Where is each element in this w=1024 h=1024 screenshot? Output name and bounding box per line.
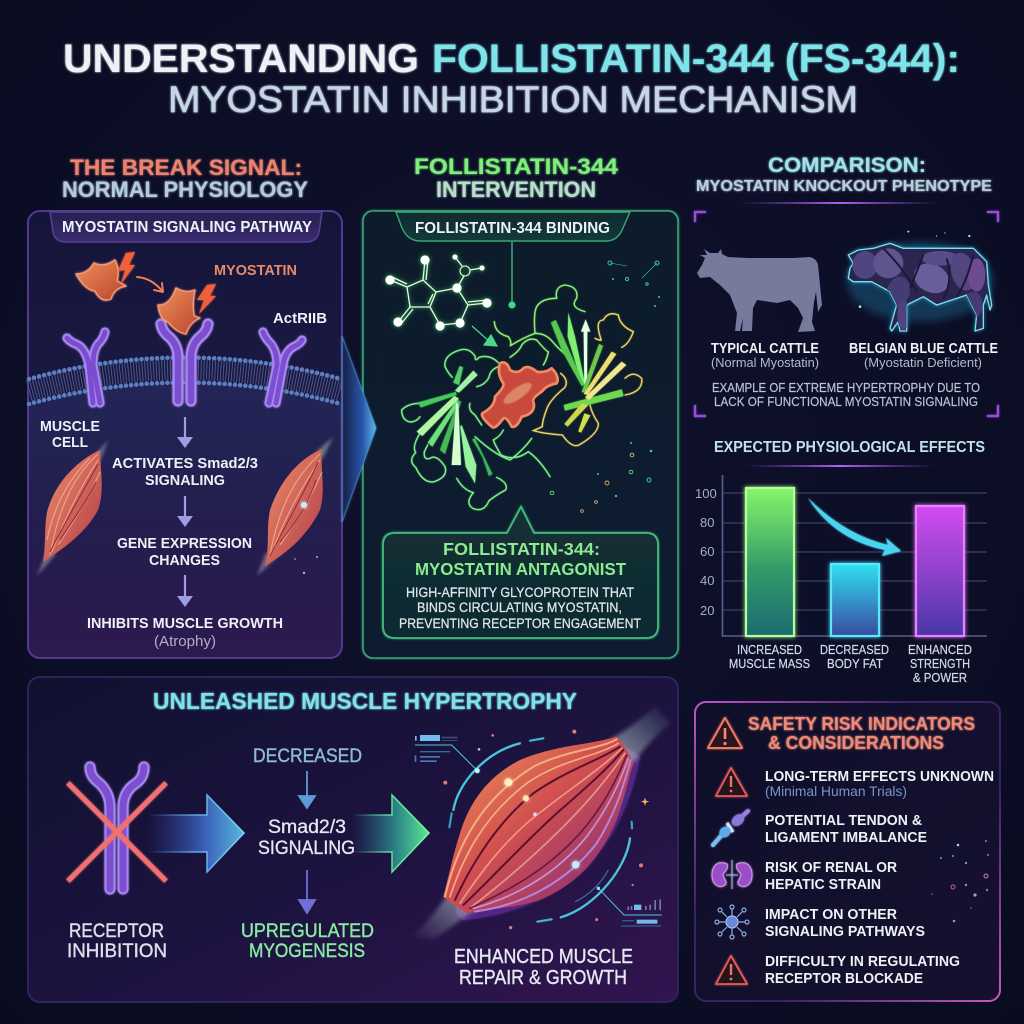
risk: tendon imbalance: LIGAMENT IMBALANCE: [765, 830, 927, 846]
bar labels: MUSCLE MASS: [729, 657, 810, 671]
label: ActRIIB: ActRIIB: [273, 310, 327, 327]
heading: & CONSIDERATIONS: [768, 733, 944, 753]
pointer line: [508, 242, 516, 309]
panel: safety risks: [695, 702, 1000, 1001]
step: activates smad: ACTIVATES Smad2/3: [112, 455, 258, 472]
axes: [722, 475, 987, 636]
label: typical cattle: [711, 341, 819, 370]
particles: [550, 261, 660, 512]
panel: follistatin binding: [363, 211, 678, 658]
title: FOLLISTATIN-344 (FS-344):: [432, 37, 960, 81]
tab heading: [50, 212, 322, 242]
risk: receptor blockade: DIFFICULTY IN REGULATING: [765, 954, 960, 970]
grid lines: [723, 493, 987, 610]
receptor left: [67, 332, 105, 403]
sparks: [443, 730, 649, 929]
heading: the break signal: [62, 155, 308, 202]
flow arrows: [177, 417, 193, 607]
callout: antagonist: [383, 507, 658, 638]
panel: cattle comparison: [695, 202, 998, 416]
callout: antagonist: HIGH-AFFINITY GLYCOPROTEIN THAT: [406, 585, 634, 600]
heading: SAFETY RISK INDICATORS: [748, 714, 975, 734]
arrow: to muscle: [352, 795, 429, 872]
description: LACK OF FUNCTIONAL MYOSTATIN SIGNALING: [714, 394, 978, 409]
tab heading: [396, 212, 630, 241]
bar: body fat: [831, 564, 879, 636]
label: enhanced muscle: ENHANCED MUSCLE: [454, 946, 633, 968]
heading: the break signal: THE BREAK SIGNAL:: [70, 155, 302, 180]
cow: belgian blue: [847, 231, 993, 331]
label: smad signaling: [258, 817, 355, 859]
molecule diagram: [385, 254, 492, 331]
frame corners: [695, 212, 998, 416]
cell membrane: [29, 358, 341, 404]
muscle belly: [443, 737, 633, 913]
bar labels: INCREASED: [737, 643, 802, 657]
step: gene expression: [117, 535, 252, 569]
label: receptor inhibition: INHIBITION: [67, 941, 167, 962]
arrow: to smad: [148, 795, 244, 872]
heading: follistatin intervention: INTERVENTION: [436, 177, 596, 202]
label: enhanced muscle: [454, 946, 633, 989]
heading: follistatin intervention: [414, 154, 619, 202]
label: myostatin: MYOSTATIN: [214, 262, 297, 279]
label: receptor inhibition: [67, 921, 167, 962]
axis labels: 20: [700, 603, 714, 618]
label: muscle cell: [40, 418, 100, 451]
axis labels: 100: [695, 486, 717, 501]
heading: the break signal: NORMAL PHYSIOLOGY: [62, 177, 308, 202]
hud widgets: [415, 735, 661, 927]
bar labels: STRENGTH: [910, 657, 970, 671]
receptor right: [263, 332, 302, 403]
step: inhibits growth: [87, 615, 283, 650]
muscle: hypertrophied: [412, 707, 671, 939]
panel: unleashed hypertrophy: [28, 677, 678, 1002]
risk: long-term effects: LONG-TERM EFFECTS UNKNOWN: [765, 769, 994, 785]
label: muscle cell: CELL: [52, 434, 88, 451]
callout: antagonist: MYOSTATIN ANTAGONIST: [415, 559, 626, 579]
axis labels: 60: [700, 544, 714, 559]
label: belgian blue: (Myostatin Deficient): [864, 355, 982, 370]
risk: tendon imbalance: [713, 811, 927, 846]
risk: long-term effects: (Minimal Human Trials): [765, 784, 907, 799]
label: myogenesis: MYOGENESIS: [249, 941, 365, 962]
risk: receptor blockade: [716, 954, 960, 987]
risk: renal strain: HEPATIC STRAIN: [765, 877, 881, 893]
muscle left: [37, 440, 108, 576]
myostatin molecule 2: [158, 284, 216, 334]
protein: follistatin yellow domain: [494, 285, 642, 446]
risk: other pathways: IMPACT ON OTHER: [765, 907, 898, 923]
bar labels: DECREASED: [820, 643, 889, 657]
receptor center: [161, 324, 208, 401]
description: EXAMPLE OF EXTREME HYPERTROPHY DUE TO: [712, 380, 980, 395]
label: receptor inhibition: RECEPTOR: [69, 921, 164, 942]
risk: renal strain: RISK OF RENAL OR: [765, 860, 898, 876]
title: [63, 37, 960, 120]
risk: receptor blockade: RECEPTOR BLOCKADE: [765, 971, 923, 987]
step: gene expression: GENE EXPRESSION: [117, 535, 252, 552]
muscle tails: [412, 707, 671, 939]
cow: typical cattle: [697, 249, 822, 332]
heading: comparison: MYOSTATIN KNOCKOUT PHENOTYPE: [696, 178, 992, 195]
axis labels: [695, 486, 717, 618]
label: decreased: DECREASED: [253, 746, 362, 767]
label: smad signaling: Smad2/3: [268, 817, 346, 838]
bar labels: ENHANCED: [908, 643, 972, 657]
panel: normal signaling pathway: [28, 211, 342, 658]
axis labels: 80: [700, 515, 714, 530]
callout: antagonist: FOLLISTATIN-344:: [443, 539, 600, 559]
arrow: myostatin to receptor: [137, 277, 163, 292]
icon: warning large: [708, 718, 742, 748]
bar labels: BODY FAT: [827, 657, 883, 671]
step: activates smad: [112, 455, 258, 489]
risk: other pathways: [715, 905, 925, 940]
heading: UNLEASHED MUSCLE HYPERTROPHY: [153, 688, 577, 714]
bar labels: & POWER: [913, 671, 967, 685]
inhibited receptor: [68, 767, 166, 889]
label: smad signaling: SIGNALING: [258, 838, 355, 859]
label: typical cattle: TYPICAL CATTLE: [711, 341, 819, 357]
muscle right: [257, 437, 333, 576]
title: UNDERSTANDING: [63, 37, 419, 81]
title: MYOSTATIN INHIBITION MECHANISM: [168, 79, 858, 120]
label: belgian blue: [849, 341, 998, 370]
hud arcs: [449, 738, 632, 922]
arrow: trend: [808, 498, 901, 556]
arrow: down 1: [299, 771, 315, 808]
risk: other pathways: SIGNALING PATHWAYS: [765, 924, 925, 940]
arrow: molecule to protein: [472, 326, 497, 346]
heading: comparison: [696, 154, 992, 195]
heading: comparison: COMPARISON:: [768, 154, 926, 177]
label: typical cattle: (Normal Myostatin): [711, 355, 819, 370]
tab heading: MYOSTATIN SIGNALING PATHWAY: [62, 219, 313, 236]
step: activates smad: SIGNALING: [145, 472, 225, 489]
label: muscle cell: MUSCLE: [40, 418, 100, 435]
heading: [748, 714, 975, 753]
step: inhibits growth: (Atrophy): [154, 633, 216, 650]
label: enhanced muscle: REPAIR & GROWTH: [459, 967, 627, 989]
risk: tendon imbalance: POTENTIAL TENDON &: [765, 813, 923, 829]
label: belgian blue: BELGIAN BLUE CATTLE: [849, 341, 998, 357]
callout: antagonist: BINDS CIRCULATING MYOSTATIN,: [417, 600, 622, 615]
risk: renal strain: [712, 860, 898, 893]
bar: muscle mass: [746, 488, 794, 636]
description: [712, 380, 980, 409]
axis labels: 40: [700, 573, 714, 588]
arrow: down 2: [299, 870, 315, 913]
tab heading: FOLLISTATIN-344 BINDING: [415, 220, 610, 237]
callout: antagonist: PREVENTING RECEPTOR ENGAGEMENT: [399, 616, 641, 631]
bar chart: [695, 475, 987, 685]
heading: follistatin intervention: FOLLISTATIN-344: [414, 154, 619, 179]
label: myogenesis: [241, 921, 374, 962]
protein: follistatin green domain: [402, 349, 550, 510]
myostatin molecule 1: [76, 252, 135, 300]
risk: long-term effects: [716, 768, 994, 799]
label: myogenesis: UPREGULATED: [241, 921, 374, 942]
myostatin target: [482, 362, 558, 427]
bar: strength: [916, 506, 964, 636]
arrow: connector between panels: [342, 336, 376, 522]
particles: [931, 840, 989, 922]
bar labels: [729, 643, 972, 685]
step: gene expression: CHANGES: [149, 552, 220, 569]
heading: expected effects: EXPECTED PHYSIOLOGICAL EFFECTS: [714, 439, 985, 456]
step: inhibits growth: INHIBITS MUSCLE GROWTH: [87, 615, 283, 632]
